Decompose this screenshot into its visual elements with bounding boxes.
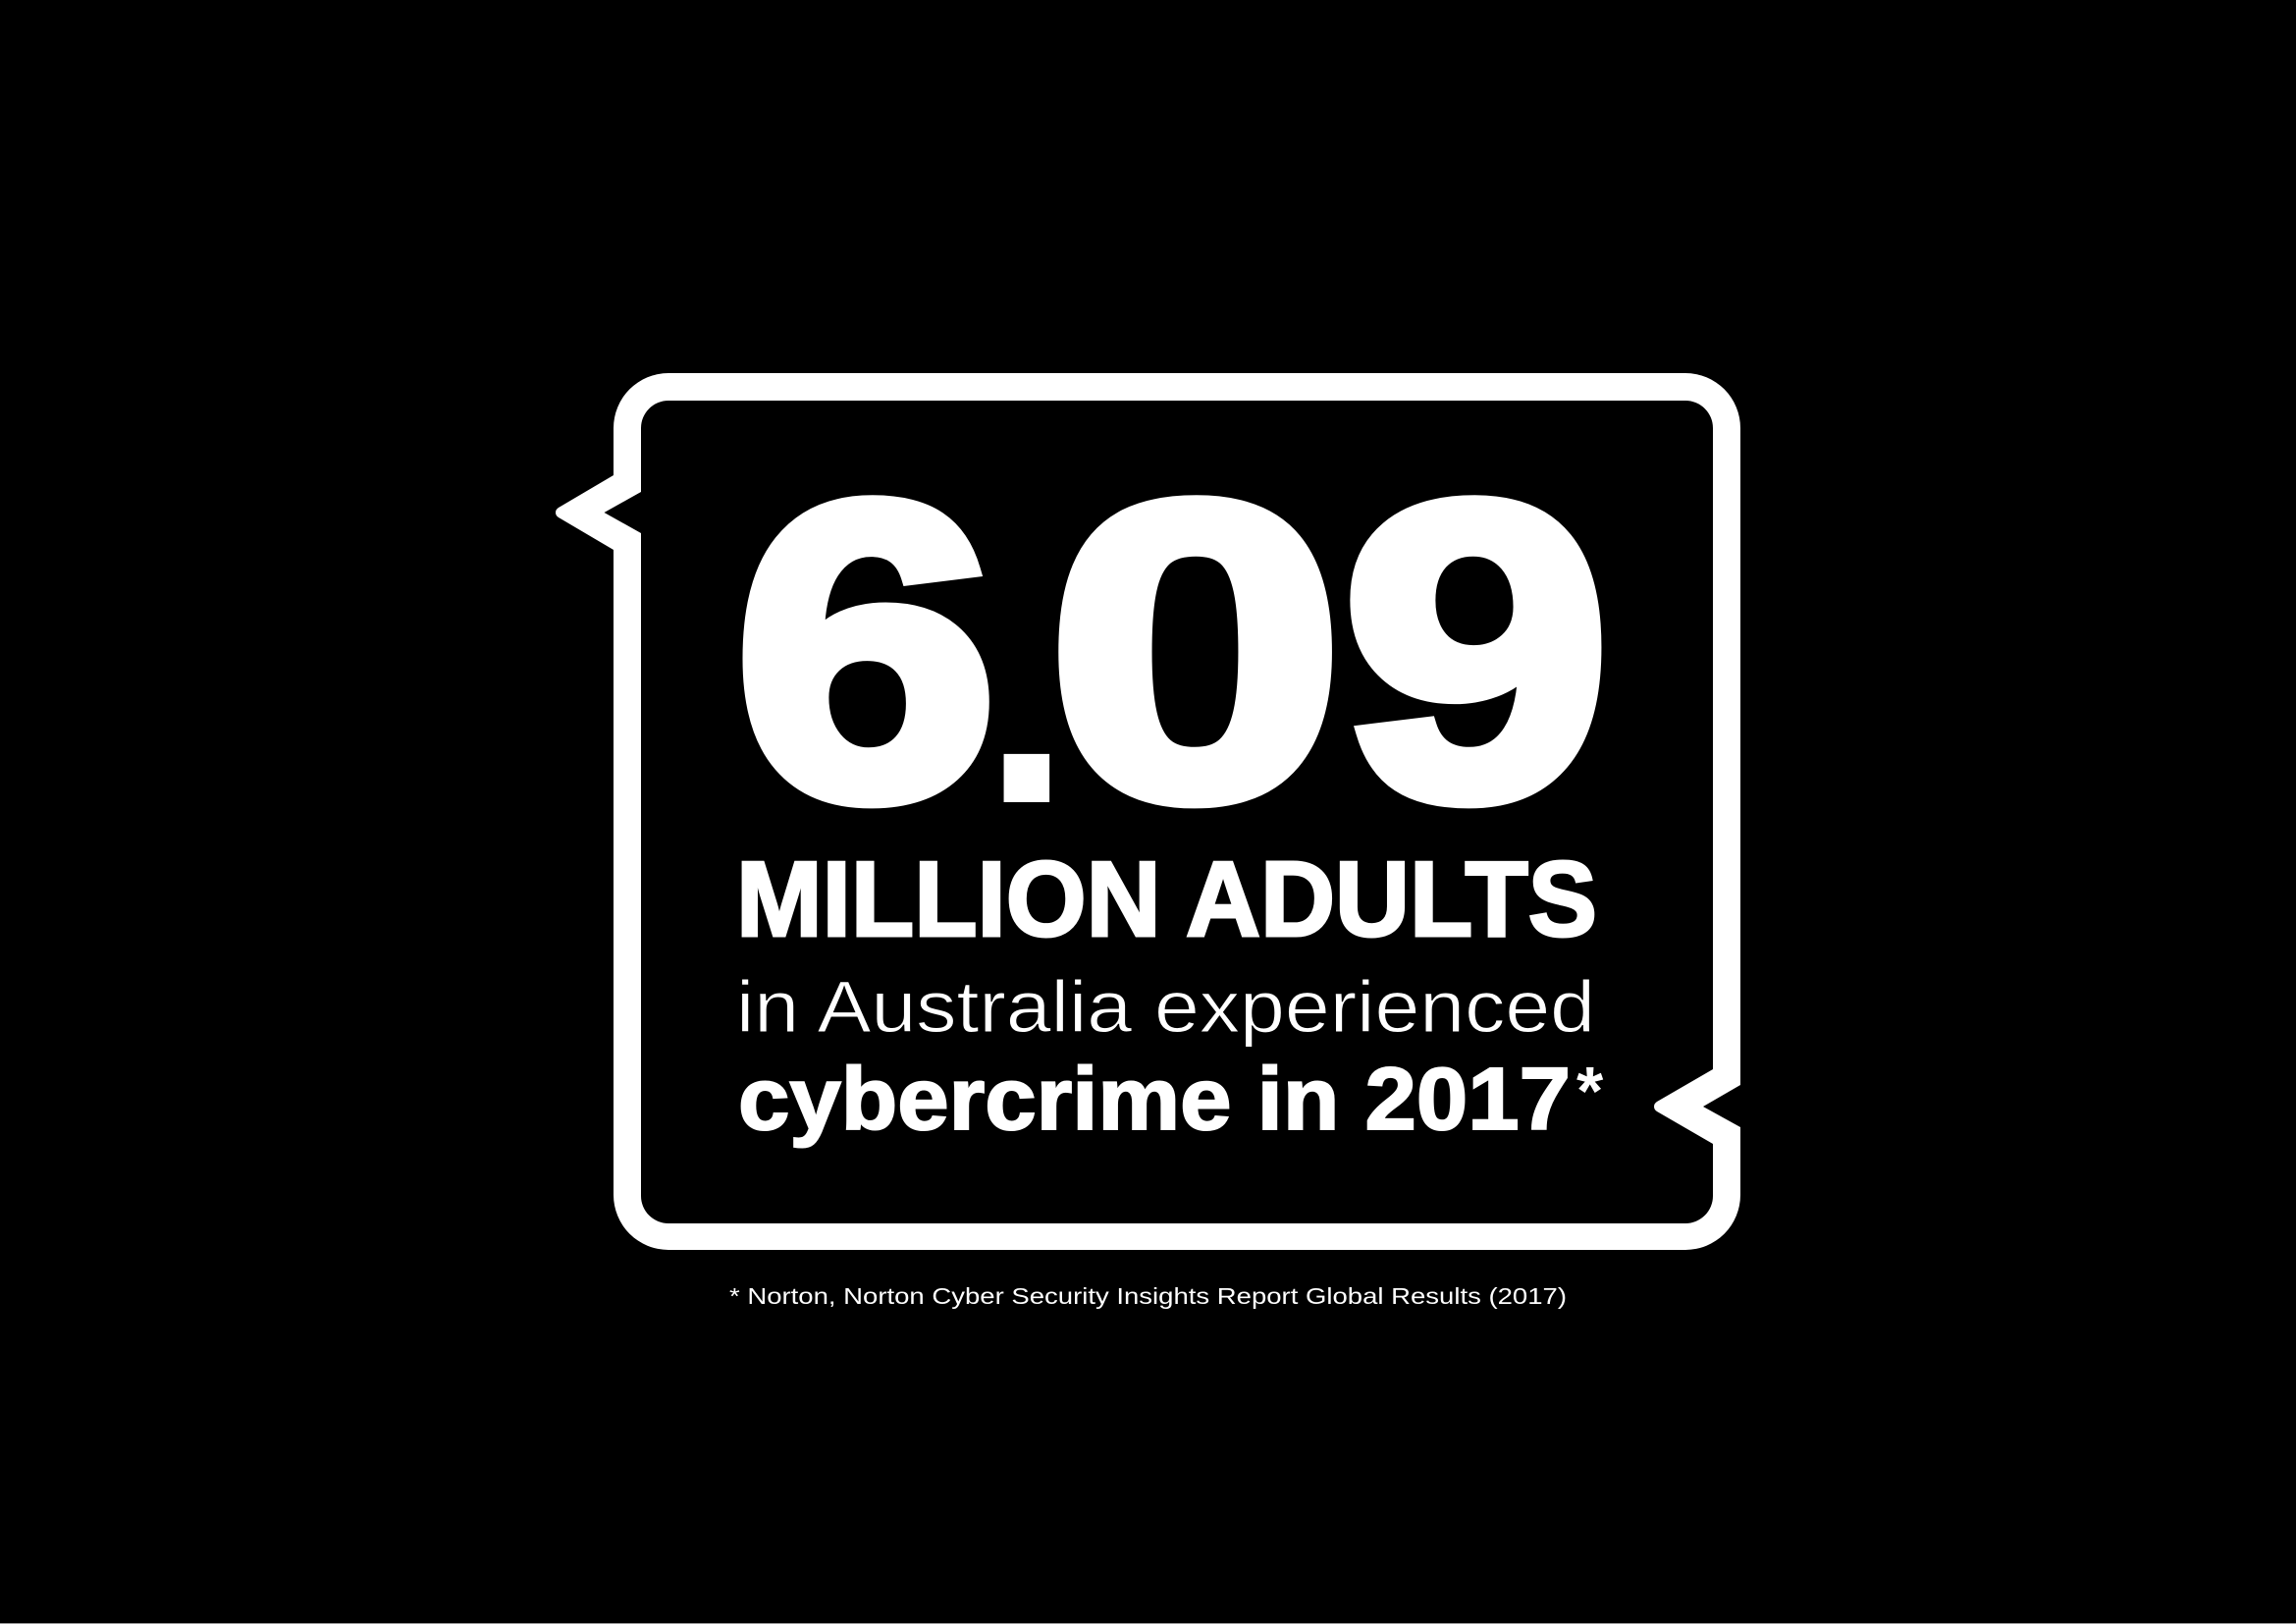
- text: in Australia experienced: in Australia experienced: [736, 966, 1595, 1048]
- headline number: 6.09: 6: [734, 417, 997, 886]
- headline number: 6.09: [734, 417, 1610, 886]
- text: cybercrime in 2017: *: [1576, 1053, 1604, 1129]
- text: cybercrime in 2017: cybercrime in 2017: [738, 1051, 1571, 1149]
- speech bubble outline: [556, 373, 1740, 1250]
- subheading: MILLION ADULTS: MILLION ADULTS: [736, 839, 1597, 959]
- headline number: 6.09: 0: [1047, 417, 1344, 886]
- footnote: source citation: * Norton, Norton Cyber Security Insights Report Global Results (2017): [729, 1283, 1567, 1309]
- headline number: 6.09: .: [982, 509, 1072, 871]
- headline number: 6.09: 9: [1343, 417, 1610, 886]
